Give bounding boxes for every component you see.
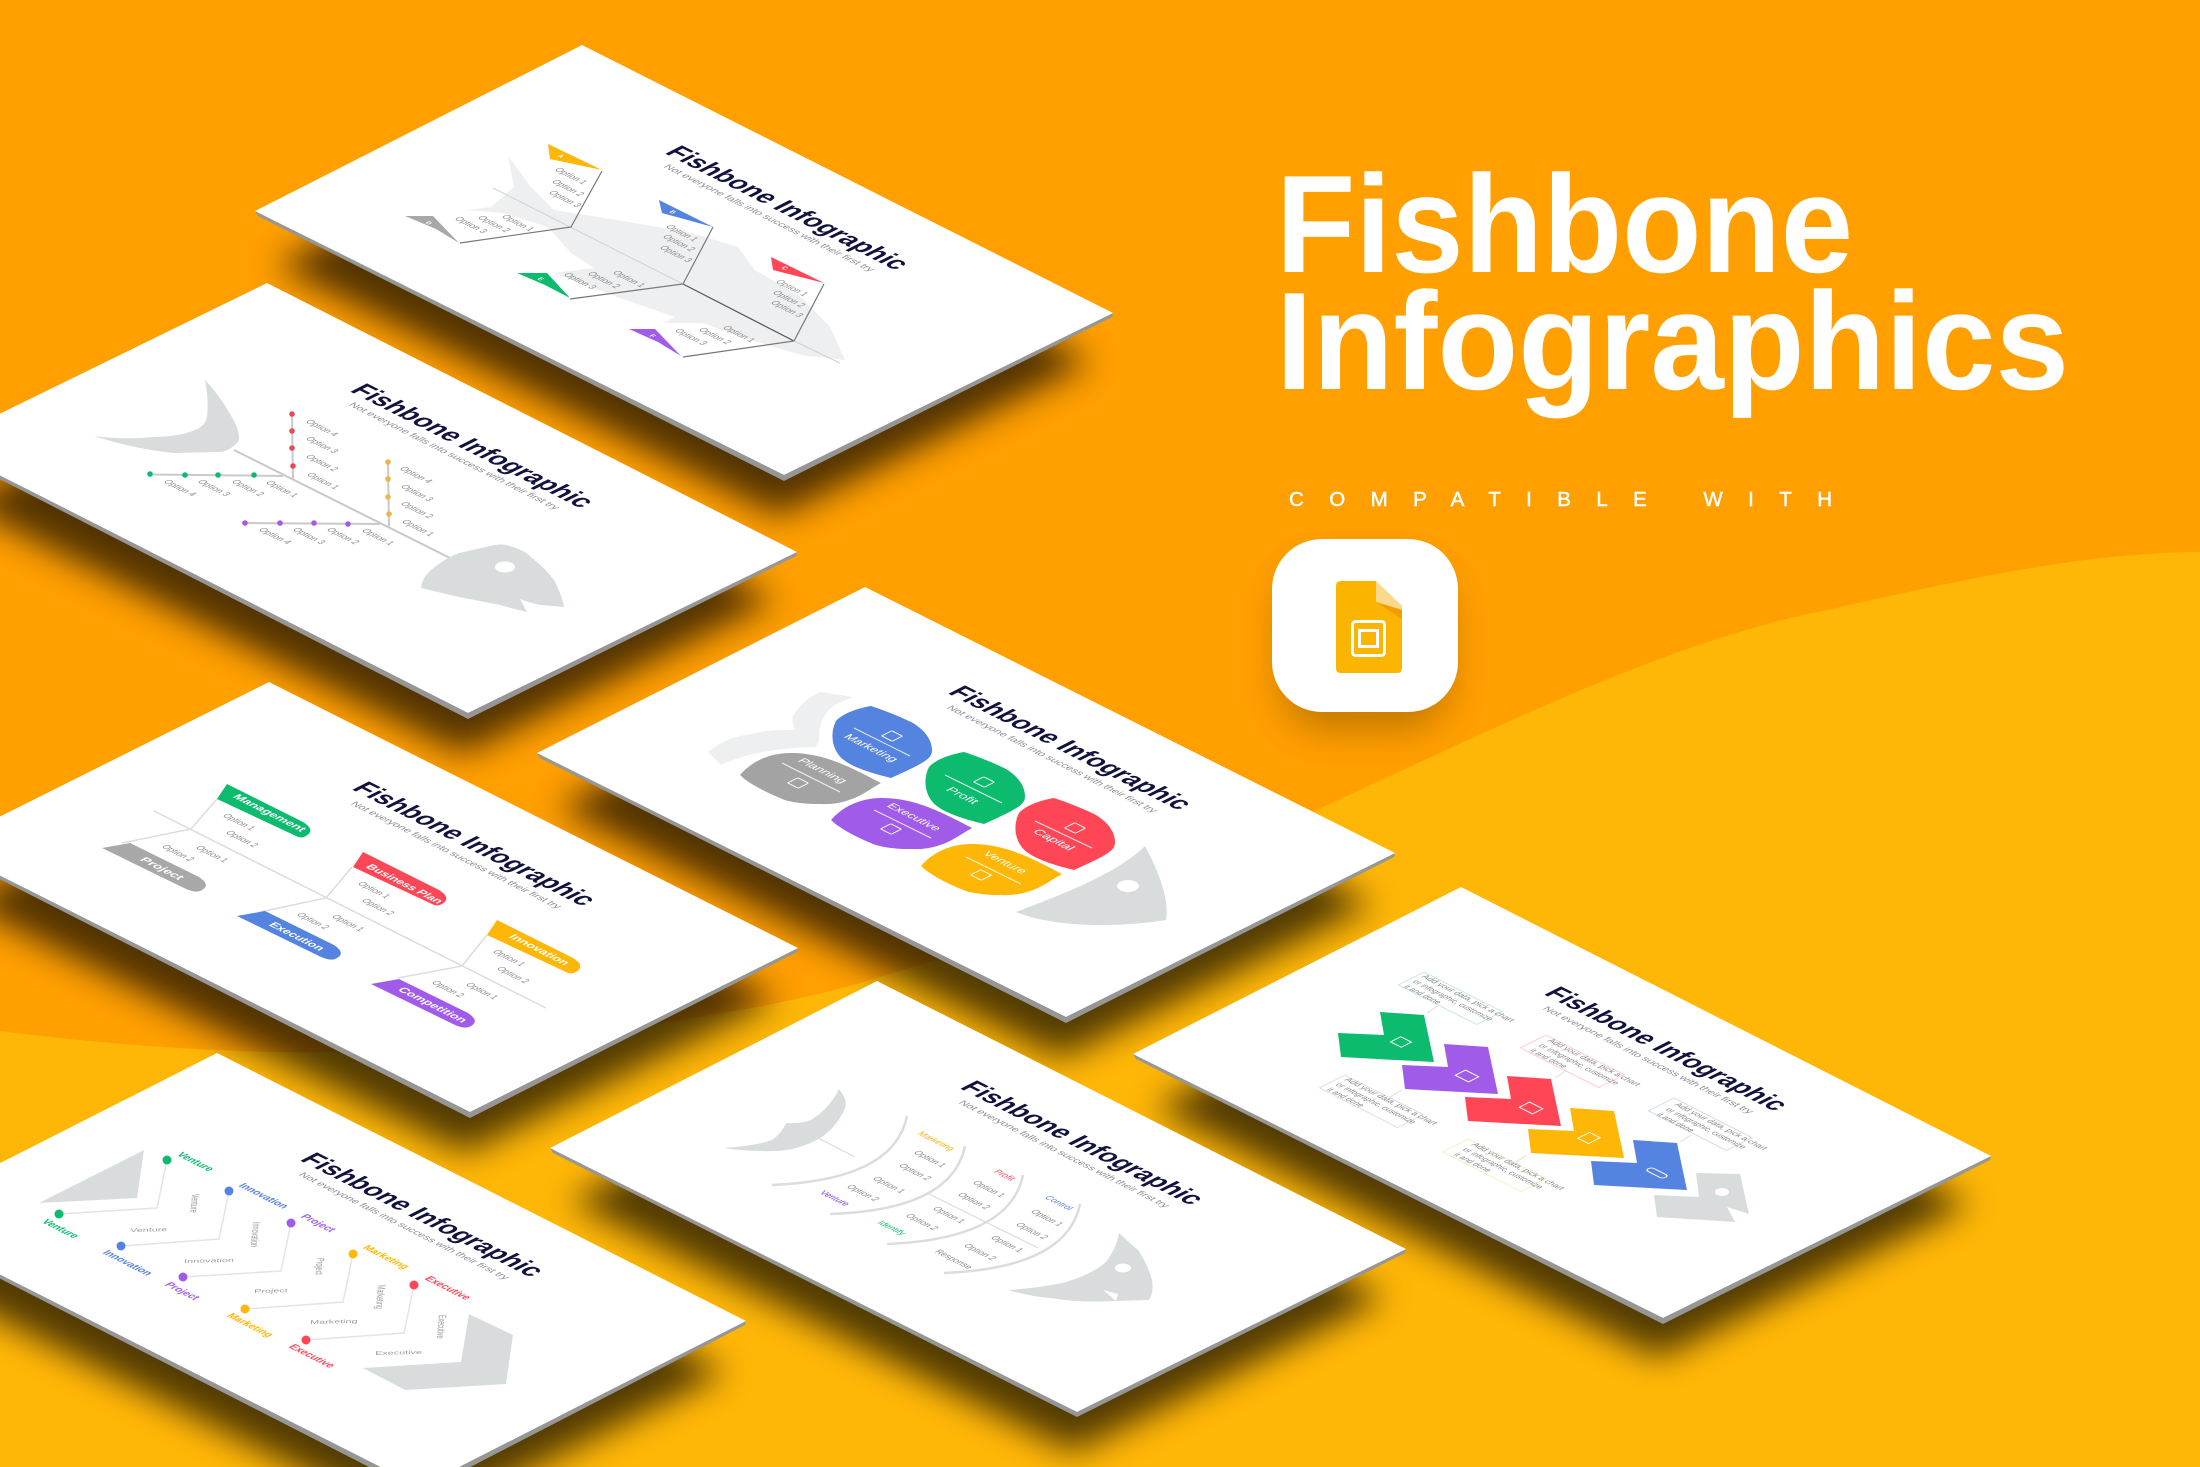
slide 1 flag letters: [423, 154, 790, 339]
slide 1 options: Option 3: [546, 189, 584, 209]
slide 7 title: Fishbone Infographic: [293, 1150, 551, 1280]
slide 5 callout text: or infographic, customize: [1333, 1082, 1419, 1125]
slide 1 options: Option 2: [696, 326, 734, 346]
slide 3 leaves: [740, 706, 1115, 895]
slide 6 head: [1008, 1233, 1153, 1302]
slide 7 colored labels: Venture: [38, 1218, 82, 1240]
slide 5 title: Fishbone Infographic: [1537, 984, 1795, 1114]
slide 4 options: Option 1: [355, 880, 393, 900]
slide 6 options: Option 1: [1028, 1208, 1066, 1228]
slide 1 options: Option 3: [657, 244, 695, 264]
slide 4 options: Option 2: [294, 911, 332, 931]
slide 5 callout text: it and done: [1527, 1048, 1570, 1070]
slide 1 options: Option 2: [475, 214, 513, 234]
slide 3 title: Fishbone Infographic: [941, 683, 1199, 813]
slide 6 rib labels: [817, 1130, 1076, 1237]
slide 6 options: Option 1: [870, 1175, 908, 1195]
slide 5 callout text: or infographic, customize: [1663, 1107, 1749, 1150]
slide 2 head: [421, 544, 564, 612]
slide 7 colored labels: Executive: [421, 1275, 474, 1302]
slide 4 options: [159, 812, 532, 1001]
slide 1 options: Option 2: [770, 289, 808, 309]
slide 7 gray labels along bones: Marketing: [373, 1285, 388, 1309]
slide 4: pills fishbone: [0, 682, 798, 1118]
slide 4 options: Option 2: [494, 965, 532, 985]
slide 5 callout text: or infographic, customize: [1460, 1147, 1546, 1190]
slide 1 flag letters: B: [667, 210, 678, 215]
slide 1 options: Option 1: [610, 269, 648, 289]
slide 1 options: Option 2: [660, 233, 698, 253]
slide 6 options: Option 1: [970, 1179, 1008, 1199]
slide 1 options: Option 1: [773, 278, 811, 298]
slide 1 options: Option 3: [672, 327, 710, 347]
slide 6 options: Response: [932, 1248, 976, 1270]
slide 1 title: Fishbone Infographic: [658, 143, 916, 273]
slide 1 branches: [460, 171, 824, 357]
slide 1 subtitle: Not everyone falls into success with their first try: [661, 163, 878, 273]
slide 6 options: Option 2: [903, 1212, 941, 1232]
slide 3 leaf icons: [788, 731, 1085, 880]
slide 7 subtitle: Not everyone falls into success with their first try: [296, 1171, 513, 1281]
slide 2 title: Fishbone Infographic: [343, 381, 601, 511]
slide 1 flag letters: D: [423, 221, 434, 226]
slide 2 options: Option 1: [399, 518, 437, 538]
slide 4 options: Option 2: [223, 829, 261, 849]
slide 6 rib labels: Venture: [817, 1189, 853, 1207]
slide 7 colored labels: Marketing: [359, 1244, 413, 1271]
slide 1 options: Option 2: [549, 178, 587, 198]
slide 5 callout boxes: [1320, 972, 1752, 1192]
slide 5 callout text: it and done: [1324, 1087, 1367, 1109]
slide 6 rib labels: Profit: [991, 1168, 1019, 1182]
slide 3 leaf labels: Venture: [979, 850, 1030, 876]
slide 1 spine: [493, 188, 840, 363]
slide 6 options: Option 2: [896, 1162, 934, 1182]
slide 6 title: Fishbone Infographic: [953, 1078, 1211, 1208]
main title: Infographics: [1276, 264, 2069, 419]
slide 7 colored labels: Marketing: [223, 1312, 277, 1339]
slide 5 callout text: [1324, 974, 1771, 1192]
slide 5 chevrons: [1338, 1012, 1687, 1190]
slide 5 callout text: it and done: [1451, 1152, 1494, 1174]
slide 6 options: [844, 1149, 1066, 1270]
slide 7 bones: [59, 1160, 414, 1340]
slide 1 flags: [405, 144, 824, 356]
slide 4 pill labels: Project: [136, 856, 188, 882]
slide 4 pill labels: Management: [229, 793, 310, 834]
slide 2: fish skeleton with dotted bones: [0, 283, 797, 719]
slide 1 options: Option 1: [720, 324, 758, 344]
slide 2 options: Option 4: [397, 465, 435, 485]
slide 5 callout connectors: [1390, 1006, 1691, 1162]
slide 4 subtitle: Not everyone falls into success with their first try: [348, 800, 565, 910]
slide 5 callout text: Add your data, pick a chart: [1545, 1038, 1644, 1088]
slide 4 pills: [102, 784, 580, 1028]
slide 6 subtitle: Not everyone falls into success with their first try: [956, 1099, 1173, 1209]
slide 6: curved ribs fish: [550, 981, 1406, 1417]
slide 7 gray labels along bones: Project: [254, 1287, 289, 1294]
slide 7 dots: [54, 1156, 418, 1344]
slide 1 options: [452, 166, 811, 347]
slide 2 options: Option 2: [324, 526, 362, 546]
slide 1 options: Option 3: [561, 271, 599, 291]
slide 2 options: Option 4: [161, 478, 199, 498]
slide 1: fish silhouette with flags: [255, 45, 1113, 481]
slide 6 tail: [723, 1089, 846, 1151]
slide 1 fish: [467, 156, 845, 360]
slide 5 callout text: or infographic, customize: [1410, 979, 1496, 1022]
slide 3 head: [1016, 846, 1167, 925]
slide 5: chevron fishbone: [1133, 887, 1991, 1324]
slide 7 gray labels along bones: Venture: [188, 1194, 202, 1213]
slide 1 options: Option 3: [768, 299, 806, 319]
slide 3 leaf labels: Marketing: [840, 733, 901, 764]
slide 2 options: Option 2: [229, 478, 267, 498]
slide 2 options: Option 3: [195, 478, 233, 498]
slide 2 spine and bones: [150, 414, 452, 559]
slide 4 pill labels: Innovation: [505, 933, 573, 967]
slide 6 rib labels: Identify: [875, 1219, 909, 1237]
slide 3 leaf dividers: [782, 728, 1092, 884]
slide 4 pill labels: Competition: [394, 986, 470, 1024]
background: yellow wave: [0, 552, 2200, 1467]
slide 7 colored labels: Venture: [173, 1151, 217, 1173]
slide 1 flag letters: E: [535, 277, 545, 282]
slide 3 subtitle: Not everyone falls into success with their first try: [944, 704, 1161, 814]
slide 7 head: [363, 1314, 513, 1390]
slide 4 options: Option 1: [490, 948, 528, 968]
slide 1 options: Option 1: [663, 223, 701, 243]
slide 3 leaf labels: [794, 733, 1077, 876]
slide 7 colored labels: [38, 1151, 474, 1370]
slide 5 callout text: it and done: [1654, 1112, 1697, 1134]
slide 2 options: Option 1: [263, 479, 301, 499]
slide 4 title: Fishbone Infographic: [345, 779, 603, 909]
slide 7 gray labels along bones: [130, 1194, 449, 1356]
slide 1 flag letters: A: [555, 154, 566, 159]
slide 5 callout text: Add your data, pick a chart: [1419, 974, 1518, 1024]
slide 2 options: Option 1: [359, 527, 397, 547]
slide 7 gray labels along bones: Marketing: [310, 1318, 358, 1325]
slide 1 options: Option 1: [499, 213, 537, 233]
slide 6 options: Option 1: [930, 1205, 968, 1225]
slide 2 options: Option 3: [303, 435, 341, 455]
slide 2 subtitle: Not everyone falls into success with their first try: [346, 401, 563, 511]
slide 4 pill labels: [136, 793, 573, 1024]
slide 4 options: Option 1: [220, 812, 258, 832]
slide 2 options: Option 2: [398, 500, 436, 520]
slide 2 bone dots: [147, 411, 392, 527]
slide 3 leaf labels: Profit: [942, 786, 982, 806]
slide 6 rib labels: Marketing: [915, 1130, 958, 1152]
slide 5 callout text: it and done: [1401, 984, 1444, 1006]
slide 5 callout text: Add your data, pick a chart: [1672, 1102, 1771, 1152]
slide 5 chevron icons: [1391, 1037, 1669, 1179]
slide 6 options: Option 2: [844, 1183, 882, 1203]
slide 7 gray labels along bones: Innovation: [184, 1257, 235, 1264]
slide 7 tail: [39, 1150, 144, 1203]
slide 2 options: Option 3: [290, 526, 328, 546]
slide 7 gray labels along bones: Executive: [434, 1315, 449, 1339]
slide 6 options: Option 2: [955, 1191, 993, 1211]
slide 1 options: Option 2: [585, 270, 623, 290]
slide 2 options: [161, 418, 437, 547]
slide 7 colored labels: Innovation: [235, 1182, 292, 1210]
slide 5 subtitle: Not everyone falls into success with their first try: [1540, 1005, 1757, 1115]
slide 5 callout text: Add your data, pick a chart: [1342, 1077, 1441, 1127]
slide 7 gray labels along bones: Executive: [375, 1349, 423, 1356]
slide 4 options: Option 1: [463, 981, 501, 1001]
slide 7 colored labels: Project: [297, 1213, 339, 1234]
slide 2 options: Option 1: [304, 471, 342, 491]
slide 4 options: Option 2: [359, 897, 397, 917]
slide 4 pill labels: Execution: [265, 921, 328, 952]
slide 5 callout text: Add your data, pick a chart: [1469, 1142, 1568, 1192]
slide 6 spine and ribs: [772, 1116, 1080, 1273]
slide 7 gray labels along bones: Project: [313, 1258, 327, 1275]
slide 2 options: Option 3: [398, 483, 436, 503]
slide 5 callout text: or infographic, customize: [1536, 1043, 1622, 1086]
slide 6 options: Option 1: [911, 1149, 949, 1169]
slide 4 options: Option 1: [329, 913, 367, 933]
slide 7 colored labels: Innovation: [99, 1249, 156, 1277]
icon: google slides app tile: [1272, 539, 1458, 730]
slide 4 options: Option 2: [429, 979, 467, 999]
slide 1 options: Option 3: [452, 215, 490, 235]
slide 7 gray labels along bones: Innovation: [248, 1222, 263, 1247]
compatible with label: COMPATIBLE WITH: [1289, 488, 1832, 511]
slide 4 pill labels: Business Plan: [362, 863, 446, 905]
slide 4 bones: [122, 799, 546, 1008]
slide 6 rib labels: Control: [1042, 1194, 1076, 1211]
slide 2 options: Option 2: [303, 453, 341, 473]
slide 4 options: Option 2: [159, 843, 197, 863]
slide 1 flag letters: F: [647, 334, 657, 339]
slide 7: arrow fishbone: [0, 1053, 746, 1467]
slide 7 colored labels: Executive: [285, 1343, 338, 1370]
slide 6 options: Option 2: [1013, 1221, 1051, 1241]
slide 3 tail: [708, 692, 853, 765]
main title: Fishbone: [1276, 147, 1853, 302]
slide 1 flag letters: C: [779, 266, 790, 271]
slide 6 options: Option 1: [988, 1234, 1026, 1254]
slide 4 options: Option 1: [193, 844, 231, 864]
slide 3 leaf labels: Planning: [794, 757, 850, 785]
slide 7 gray labels along bones: Venture: [130, 1226, 168, 1233]
slide 2 options: Option 4: [303, 418, 341, 438]
slide 3: leaf shaped fish: [537, 587, 1395, 1023]
slide 1 options: Option 1: [552, 166, 590, 186]
slide 7 colored labels: Project: [161, 1281, 203, 1302]
slide 3 leaf labels: Capital: [1029, 828, 1077, 852]
slide 5 head: [1654, 1173, 1749, 1222]
slide 2 options: Option 4: [256, 526, 294, 546]
slide 6 options: Option 2: [961, 1242, 999, 1262]
main title: [1276, 147, 2069, 419]
slide 2 tail: [94, 380, 239, 453]
slide 3 leaf labels: Executive: [883, 802, 944, 833]
